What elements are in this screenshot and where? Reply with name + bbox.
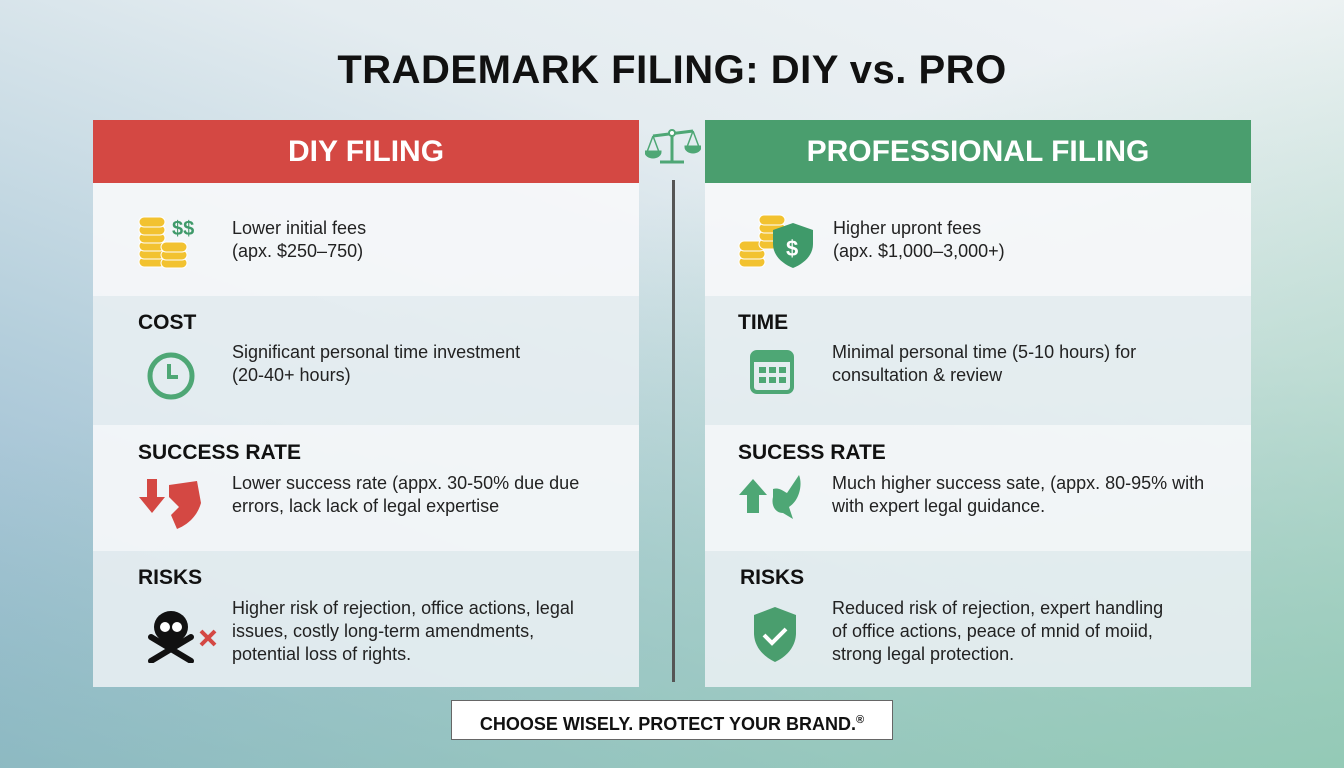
text: risks: Higher risk of rejection, office actions, legal [232, 598, 574, 618]
title: TRADEMARK FILING: DIY vs. PRO [337, 48, 1007, 92]
text: success [832, 473, 1204, 516]
text: time [832, 342, 1136, 385]
row: fees [93, 183, 639, 296]
text: fees: (apx. $1,000–3,000+) [833, 241, 1005, 261]
text: fees: Lower initial fees [232, 218, 366, 238]
text: time: Minimal personal time (5-10 hours) for [832, 342, 1136, 362]
header: DIY: DIY FILING [288, 135, 444, 168]
text: risks: potential loss of rights. [232, 644, 411, 664]
icon: clock [148, 352, 194, 400]
text: time: Significant personal time investment [232, 342, 520, 362]
heading: time: TIME [738, 311, 788, 334]
text: fees [232, 218, 366, 261]
row: cost/time [93, 296, 639, 425]
text: time: consultation & review [832, 365, 1002, 385]
heading: risks: RISKS [138, 566, 202, 589]
header: professional [705, 120, 1251, 183]
text: risks: strong legal protection. [832, 644, 1014, 664]
text: risks: issues, costly long-term amendments, [232, 621, 534, 641]
row: risks [93, 551, 639, 687]
text: fees: (apx. $250–750) [232, 241, 363, 261]
icon: calendar [750, 350, 794, 394]
icon: shield check [754, 607, 796, 662]
icon: coins: $$ [172, 218, 194, 240]
text: success: Much higher success sate, (appx. 80-95% with [832, 473, 1204, 493]
row: fees [705, 183, 1251, 296]
text: risks [832, 598, 1163, 664]
text: risks [232, 598, 574, 664]
panel: DIY filing [93, 120, 639, 687]
text: success: errors, lack lack of legal expertise [232, 496, 499, 516]
text: risks: Reduced risk of rejection, expert handling [832, 598, 1163, 618]
row: time [705, 296, 1251, 425]
text: success: with expert legal guidance. [832, 496, 1045, 516]
row: risks [705, 551, 1251, 687]
text: fees: Higher upront fees [833, 218, 981, 238]
row: success [705, 425, 1251, 551]
footer callout: CHOOSE WISELY. PROTECT YOUR BRAND.® [480, 714, 864, 734]
icon: coins shield: $ [786, 236, 798, 261]
header: professional: PROFESSIONAL FILING [807, 135, 1149, 168]
text: success: Lower success rate (appx. 30-50% due due [232, 473, 579, 493]
divider line [672, 180, 675, 682]
heading: cost: COST [138, 311, 196, 334]
icon: arrow up and dove [739, 475, 800, 519]
text: success [232, 473, 579, 516]
heading: risks: RISKS [740, 566, 804, 589]
heading: success rate: SUCCESS RATE [138, 441, 301, 464]
row: success [93, 425, 639, 551]
icon: coins shield [738, 214, 813, 268]
icon: skull [148, 611, 216, 663]
panel: professional filing [705, 120, 1251, 687]
header: DIY [93, 120, 639, 183]
footer callout [451, 700, 893, 740]
text: risks: of office actions, peace of mnid of moiid, [832, 621, 1153, 641]
text: time: (20-40+ hours) [232, 365, 351, 385]
icon: scales [645, 129, 701, 164]
text: time [232, 342, 520, 385]
heading: success: SUCESS RATE [738, 441, 886, 464]
text: fees [833, 218, 1005, 261]
icon: down arrow broken [139, 479, 201, 529]
icon: coins [138, 216, 194, 268]
